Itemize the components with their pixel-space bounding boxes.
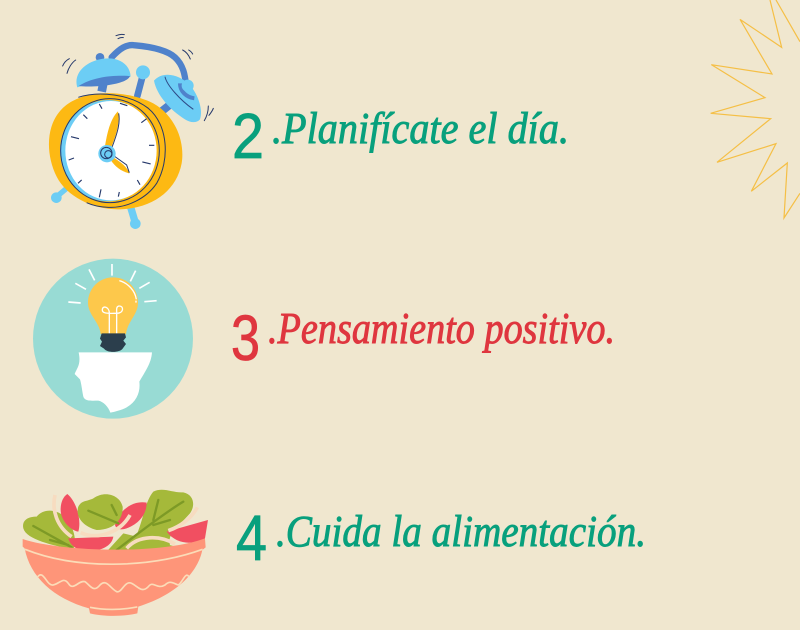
- clock feet: [51, 188, 141, 229]
- heading: step 4: 4: [236, 502, 267, 574]
- bowl decoration: [25, 549, 203, 610]
- right bell: [154, 75, 201, 122]
- leaf veins: [33, 500, 183, 550]
- vibration lines: [63, 34, 213, 121]
- icon: salad bowl: [23, 490, 208, 616]
- icon: sunburst outline: [711, 0, 800, 218]
- middle lettuce leaf: [78, 494, 123, 530]
- light rays: [68, 264, 157, 303]
- heading: step 4: .Cuida la alimentación.: [276, 507, 646, 556]
- heading: step 4: [236, 502, 646, 574]
- lettuce leaves: [23, 490, 193, 553]
- bulb glass: [88, 277, 138, 334]
- heading: step 3: 3: [231, 302, 260, 374]
- clock hands: [98, 111, 129, 173]
- heading: step 3: .Pensamiento positivo.: [268, 304, 615, 353]
- onion rings: [54, 495, 197, 548]
- tomato slices: [61, 494, 208, 551]
- clock tick marks: [69, 103, 154, 197]
- filament: [102, 306, 123, 333]
- bowl: [23, 538, 206, 616]
- heading: step 2: .Planifícate el día.: [272, 104, 569, 153]
- icon: light bulb over head: [33, 259, 193, 419]
- clock face: [60, 100, 157, 201]
- teal circle: [33, 259, 193, 419]
- icon: alarm clock: [49, 34, 213, 229]
- heading: step 2: [232, 100, 569, 172]
- clock handle and posts: [96, 45, 186, 113]
- heading: step 2: 2: [232, 100, 264, 172]
- left bell: [76, 58, 131, 87]
- head silhouette: [75, 352, 152, 413]
- bulb base: [100, 333, 126, 352]
- bulb highlight: [119, 281, 136, 303]
- clock body: [49, 93, 182, 209]
- clock outlines: [61, 94, 165, 207]
- heading: step 3: [231, 302, 615, 374]
